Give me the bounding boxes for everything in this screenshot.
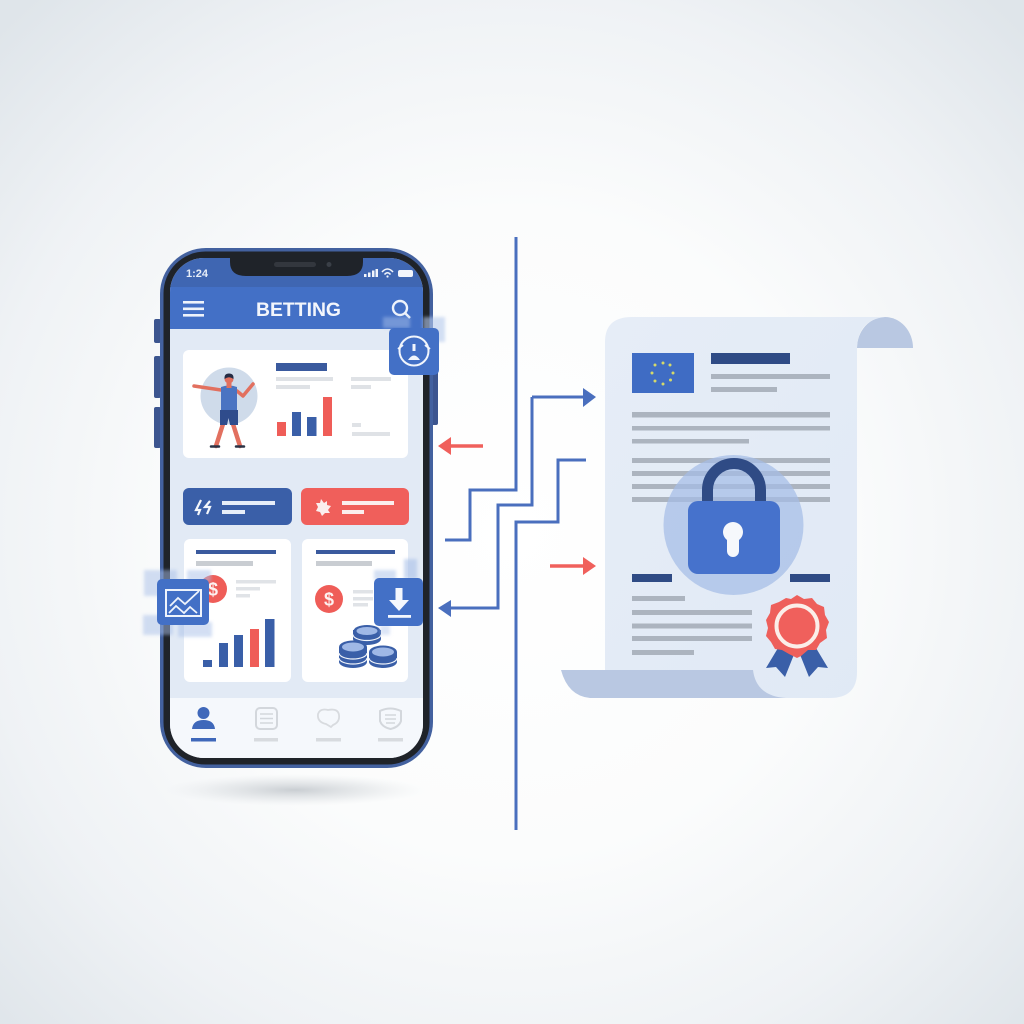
red action button — [301, 488, 409, 525]
padlock — [688, 464, 780, 574]
bottom nav: chat — [316, 710, 341, 742]
document bottom roll — [561, 670, 790, 698]
chart card — [184, 539, 291, 682]
floating badge: gauge — [383, 317, 445, 375]
dollar icon: $ — [324, 590, 334, 610]
bottom nav: shield — [378, 708, 403, 742]
person illustration — [194, 368, 258, 446]
status time: 1:24 — [186, 268, 209, 280]
legal document — [561, 317, 913, 698]
red arrow right — [550, 557, 596, 575]
document text lines — [632, 374, 830, 502]
red arrow left — [438, 437, 483, 455]
lock halo — [664, 455, 804, 595]
main card — [183, 350, 408, 458]
section bars — [632, 574, 830, 582]
menu icon — [183, 301, 204, 317]
card text lines — [276, 377, 391, 436]
dollar icon — [199, 575, 227, 603]
document top roll — [857, 317, 913, 348]
phone side buttons — [154, 319, 438, 448]
floating badge: download — [374, 559, 423, 635]
blue action button — [183, 488, 292, 525]
card heading bar — [276, 363, 327, 371]
document sheet — [605, 317, 885, 698]
coin stacks — [339, 625, 397, 668]
bottom nav: profile — [191, 707, 216, 742]
dollar icon — [315, 585, 343, 613]
EU flag — [632, 353, 694, 393]
bar chart — [277, 397, 332, 436]
notch — [230, 257, 363, 276]
floating badge: line chart — [143, 570, 212, 637]
phone shadow — [165, 774, 425, 806]
header title: BETTING — [256, 300, 341, 321]
lower text lines — [632, 596, 752, 655]
dollar icon: $ — [208, 580, 218, 600]
connector arrow to document — [438, 388, 596, 617]
phone body — [160, 248, 433, 768]
seal with ribbon — [766, 595, 829, 677]
chart card text lines — [236, 580, 276, 598]
divider line with connector — [445, 237, 586, 830]
coins card — [302, 539, 408, 682]
bottom nav: document — [254, 708, 278, 742]
document heading bar — [711, 353, 790, 364]
phone — [154, 248, 438, 768]
status icons — [364, 269, 413, 278]
coins card text lines — [353, 590, 373, 606]
search icon — [393, 301, 410, 318]
rising bar chart — [203, 619, 274, 667]
phone screen — [170, 258, 423, 758]
